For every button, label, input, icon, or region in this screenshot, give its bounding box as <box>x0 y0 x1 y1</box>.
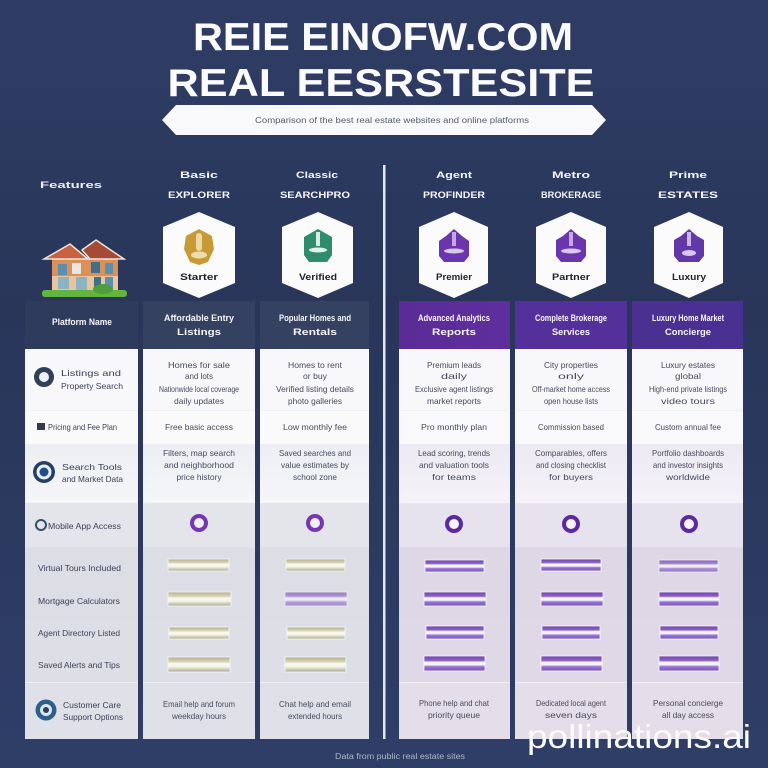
column 3 badge <box>419 212 488 298</box>
column 2 description: or buy <box>303 371 328 381</box>
column 1 rows <box>143 349 255 739</box>
column 2 mobile icon <box>308 516 322 530</box>
column 2 heading <box>280 170 350 200</box>
column 3 description: market reports <box>427 396 481 406</box>
column 3 support text: priority queue <box>428 710 480 720</box>
column 2 badge <box>282 212 353 298</box>
column 3 tools text: for teams <box>432 472 476 482</box>
column 3 support text: Phone help and chat <box>419 698 490 708</box>
column 4 description: only <box>558 371 585 381</box>
column 5 tools text: and investor insights <box>653 460 723 470</box>
column 4 description <box>532 360 610 406</box>
column 2 tools text: value estimates by <box>281 460 350 470</box>
column 5 tools text: worldwide <box>665 472 710 482</box>
column 4 support text <box>536 698 607 720</box>
label: alerts: Saved Alerts and Tips <box>38 660 120 670</box>
column 1 price: Free basic access <box>165 422 233 432</box>
column 3 price: Pro monthly plan <box>421 422 487 432</box>
vertical divider <box>383 165 386 739</box>
column 5 heading: Prime <box>669 170 707 180</box>
column 4 support text: seven days <box>545 710 597 720</box>
column 4 heading: Metro <box>552 170 591 180</box>
label header: Platform Name <box>52 317 112 327</box>
column 2 header: Rentals <box>293 327 337 337</box>
label: tools: Search Tools <box>62 462 122 472</box>
column 3 tools text: and valuation tools <box>419 460 489 470</box>
column 2 description: photo galleries <box>288 396 342 406</box>
column 4 rating bars <box>541 559 603 671</box>
column 5 tools text: Portfolio dashboards <box>652 448 724 458</box>
column 2 header <box>260 301 369 349</box>
label: mortgage: Mortgage Calculators <box>38 596 120 606</box>
footer note: Data from public real estate sites <box>335 752 465 761</box>
label: mobile app: Mobile App Access <box>48 521 121 531</box>
label: listings <box>34 367 123 391</box>
column 2 description: Homes to rent <box>288 360 343 370</box>
column 5 support text <box>653 698 723 720</box>
column 4 header: Services <box>552 327 590 337</box>
column 1 heading: EXPLORER <box>168 190 231 200</box>
column 5 description: video tours <box>661 396 715 406</box>
column 1 support text: weekday hours <box>171 711 226 721</box>
column 5 badge <box>654 212 723 298</box>
column 5 mobile icon <box>682 517 696 531</box>
column 1 badge: Starter <box>180 272 219 282</box>
column 1 support text: Email help and forum <box>163 699 235 709</box>
column 4 price: Commission based <box>538 422 604 432</box>
column 4 tools text: Comparables, offers <box>535 448 607 458</box>
column 3 badge: Premier <box>436 272 473 282</box>
column 2 rows <box>260 349 369 739</box>
row dividers <box>25 410 743 683</box>
column 1 heading <box>168 170 231 200</box>
column 2 <box>260 170 369 739</box>
column 4 badge: Partner <box>552 272 591 282</box>
column 2 support text: Chat help and email <box>279 699 351 709</box>
column 5 support text: all day access <box>662 710 714 720</box>
title: REAL EESRSTESITE <box>168 62 594 105</box>
column 5 header: Luxury Home Market <box>652 313 724 323</box>
column 1 description <box>159 360 239 406</box>
column 3 description: daily <box>441 371 468 381</box>
column 4 badge <box>536 212 606 298</box>
column 2 tools text: Saved searches and <box>279 448 351 458</box>
column 1 badge <box>163 212 235 298</box>
column 5 support text: Personal concierge <box>653 698 723 708</box>
column 4 header: Complete Brokerage <box>535 313 607 323</box>
column 1 description: and lots <box>185 371 213 381</box>
column 1 support text <box>163 699 235 721</box>
column 1 heading: Basic <box>180 170 218 180</box>
column 3 description: Exclusive agent listings <box>415 384 493 394</box>
label: support <box>36 700 123 722</box>
column 5 description: Luxury estates <box>661 360 715 370</box>
column 3 tools text <box>418 448 490 482</box>
column 5 rating bars <box>659 560 719 671</box>
column 2 support text <box>279 699 351 721</box>
column 2 heading: Classic <box>296 170 338 180</box>
label header <box>25 301 138 349</box>
column 3 description <box>415 360 493 406</box>
column 2 description <box>276 360 354 406</box>
label: virtual tours: Virtual Tours Included <box>38 563 121 573</box>
title <box>168 16 594 105</box>
column 3 header: Advanced Analytics <box>418 313 490 323</box>
column 4 rows <box>515 349 627 739</box>
column 4 heading: BROKERAGE <box>541 190 601 200</box>
column 2 heading: SEARCHPRO <box>280 190 350 200</box>
label: support: Customer Care <box>63 700 121 710</box>
column 5 description: High-end private listings <box>649 384 727 394</box>
column 2 price: Low monthly fee <box>283 422 347 432</box>
column 2 badge: Verified <box>299 272 337 282</box>
column 4 header <box>515 301 627 349</box>
column 2 description: Verified listing details <box>276 384 354 394</box>
column 1 tools text <box>163 448 235 482</box>
column 3 heading: PROFINDER <box>423 190 486 200</box>
heading: features: Features <box>40 180 102 190</box>
column 3 support text <box>419 698 490 720</box>
column 5 description: global <box>675 371 701 381</box>
column 4 tools text: and closing checklist <box>536 460 607 470</box>
column 3 tools text: Lead scoring, trends <box>418 448 490 458</box>
column 3 description: Premium leads <box>427 360 481 370</box>
label: agents: Agent Directory Listed <box>38 628 120 638</box>
column 2 rating bars <box>285 559 347 672</box>
column 3 mobile icon <box>447 517 461 531</box>
column 5 badge: Luxury <box>672 272 706 282</box>
column 5 tools text <box>652 448 724 482</box>
title: REIE EINOFW.COM <box>193 16 573 59</box>
label: tools: and Market Data <box>62 474 123 484</box>
watermark: pollinations.ai <box>527 718 751 755</box>
column 3 heading <box>423 170 486 200</box>
subtitle banner <box>162 105 606 135</box>
column 1 mobile icon <box>192 516 206 530</box>
column 5 header: Concierge <box>665 327 711 337</box>
label rows background <box>25 349 138 739</box>
column 3 header <box>399 301 510 349</box>
column 4 description: City properties <box>544 360 598 370</box>
column 4 heading <box>541 170 601 200</box>
label: pricing: Pricing and Fee Plan <box>48 422 117 432</box>
column 5 heading: ESTATES <box>658 190 718 200</box>
column 5 <box>632 170 743 739</box>
column 1 header: Listings <box>177 327 221 337</box>
column 5 header <box>632 301 743 349</box>
column 1 description: Homes for sale <box>168 360 230 370</box>
column 3 header: Reports <box>432 327 476 337</box>
column 2 tools text: school zone <box>293 472 337 482</box>
column 3 <box>399 170 510 739</box>
column 1 description: daily updates <box>174 396 224 406</box>
label column <box>25 301 138 739</box>
icon: house <box>42 240 127 297</box>
label: listings: Listings and <box>61 368 121 378</box>
column 3 rows <box>399 349 510 739</box>
subtitle banner: Comparison of the best real estate websites and online platforms <box>255 116 529 125</box>
column 1 rating bars <box>168 559 231 672</box>
column 4 description: open house lists <box>544 396 598 406</box>
column 4 tools text: for buyers <box>549 472 593 482</box>
column 1 description: Nationwide local coverage <box>159 384 239 394</box>
column 5 description <box>649 360 727 406</box>
column 3 rating bars <box>424 560 486 671</box>
label: listings: Property Search <box>61 381 123 391</box>
column 1 tools text: price history <box>176 472 222 482</box>
column 5 rows <box>632 349 743 739</box>
column 4 <box>515 170 627 739</box>
column 1 tools text: Filters, map search <box>163 448 235 458</box>
column 3 heading: Agent <box>436 170 472 180</box>
column 2 tools text <box>279 448 351 482</box>
label: tools <box>33 461 123 484</box>
column 5 heading <box>658 170 718 200</box>
column 1 <box>143 170 255 739</box>
column 2 support text: extended hours <box>288 711 342 721</box>
label: support: Support Options <box>63 712 123 722</box>
column 2 header: Popular Homes and <box>279 313 351 323</box>
column 1 header: Affordable Entry <box>164 313 234 323</box>
column 1 tools text: and neighborhood <box>164 460 234 470</box>
column 4 support text: Dedicated local agent <box>536 698 607 708</box>
column 5 price: Custom annual fee <box>655 422 721 432</box>
column 4 mobile icon <box>564 517 578 531</box>
column 1 header <box>143 301 255 349</box>
column 4 description: Off-market home access <box>532 384 610 394</box>
column 4 tools text <box>535 448 607 482</box>
